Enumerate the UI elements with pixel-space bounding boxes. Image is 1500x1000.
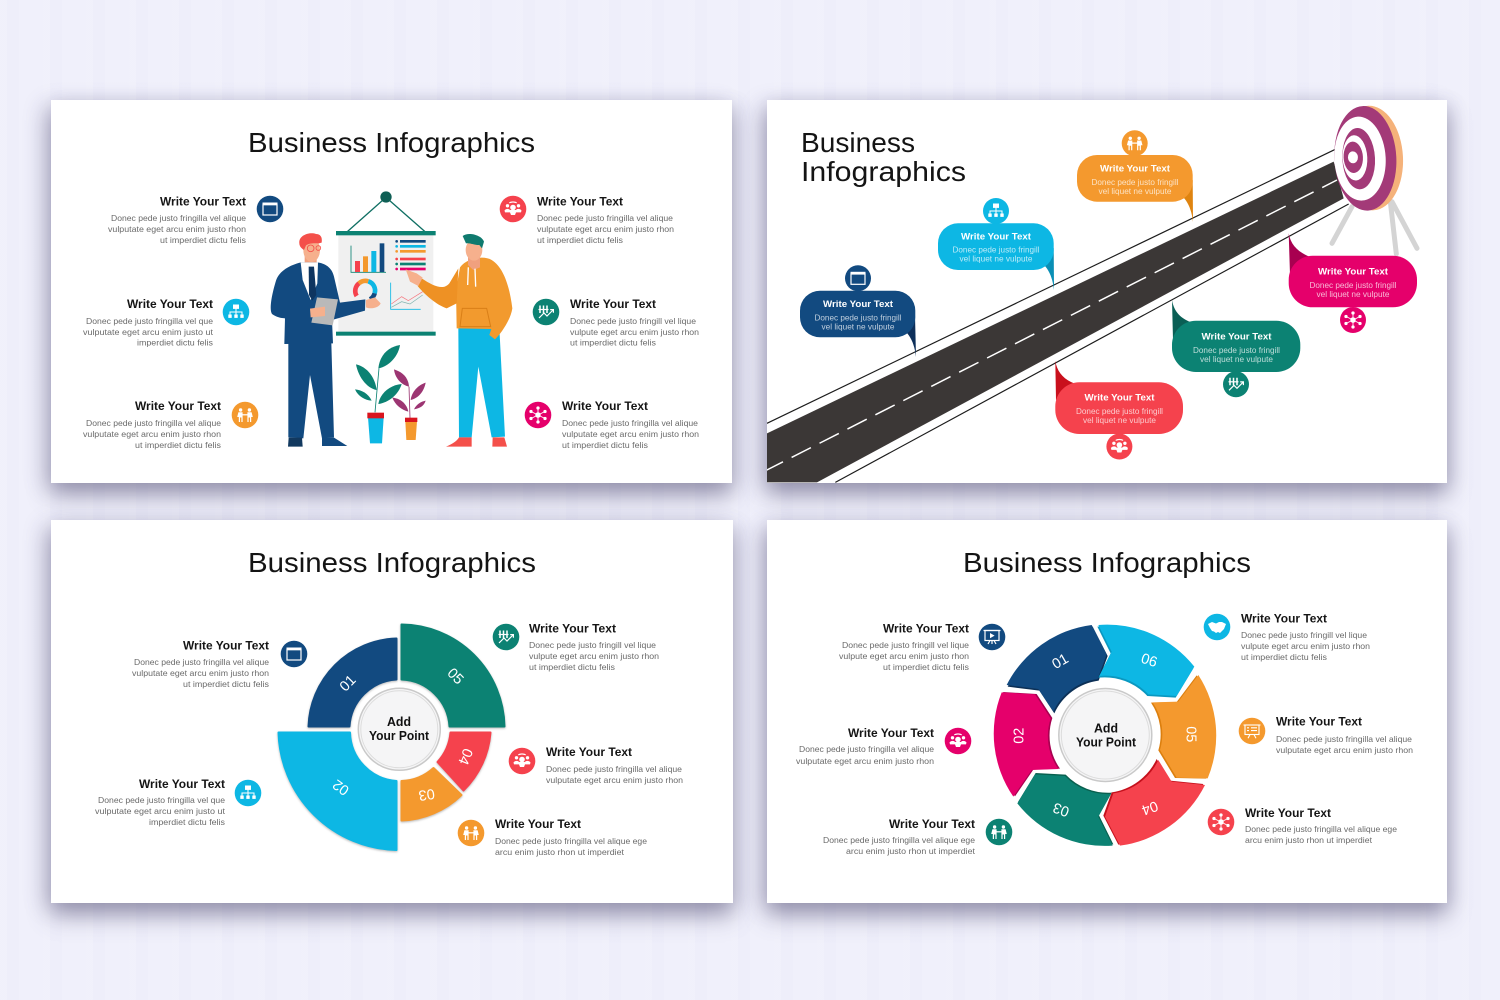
body text: ut imperdiet dictu felis bbox=[562, 440, 648, 450]
body text bbox=[546, 764, 683, 785]
callout: red bbox=[1055, 361, 1183, 460]
body text bbox=[796, 744, 934, 766]
body text: ut imperdiet dictu felis bbox=[529, 662, 615, 672]
body text: ut imperdiet dictu felis bbox=[537, 235, 623, 245]
callout text: Write Your Text bbox=[1100, 164, 1171, 174]
body text: vulputate eget arcu enim justo rhon bbox=[132, 668, 269, 678]
icon: network bbox=[525, 402, 551, 428]
heading: Write Your Text bbox=[570, 299, 656, 311]
arrow ring bbox=[994, 625, 1216, 846]
item: top left text bbox=[108, 196, 283, 245]
body text: ut imperdiet dictu felis bbox=[135, 440, 221, 450]
body text: vulpute eget arcu enim justo rhon bbox=[1241, 641, 1370, 651]
icon: handshake bbox=[1204, 614, 1230, 640]
body text: Donec pede justo fringill vel lique bbox=[1241, 630, 1367, 640]
body text: arcu enim justo rhon ut imperdiet bbox=[495, 847, 625, 857]
center circle: Your Point bbox=[1076, 736, 1137, 750]
segment 02 bbox=[278, 732, 396, 850]
body text: Donec pede justo fringill vel lique bbox=[570, 316, 696, 326]
callout: magenta bbox=[1289, 233, 1417, 333]
heading: Write Your Text bbox=[139, 779, 225, 791]
body text: Donec pede justo fringilla vel alique bbox=[134, 657, 269, 667]
body text bbox=[1276, 734, 1413, 755]
body text: Donec pede justo fringilla vel alique bbox=[546, 764, 682, 774]
body text: Donec pede justo fringilla vel alique bbox=[799, 744, 934, 754]
body text: vulpute eget arcu enim justo rhon bbox=[570, 327, 699, 337]
center circle: Add bbox=[1094, 722, 1118, 736]
body text: Donec pede justo fringilla vel alique bbox=[562, 418, 698, 428]
icon: org chart bbox=[235, 780, 261, 806]
callout text bbox=[1310, 266, 1397, 299]
heading: Write Your Text bbox=[135, 401, 221, 413]
segment 04 bbox=[438, 732, 490, 790]
center circle: Add bbox=[387, 715, 411, 729]
body text: Donec pede justo fringill vel lique bbox=[529, 640, 656, 650]
body text: vulputate eget arcu enim justo rhon bbox=[796, 756, 934, 766]
item 02 text bbox=[796, 728, 971, 766]
item 01 text bbox=[839, 624, 1005, 672]
body text: Donec pede justo fringilla vel que bbox=[98, 795, 225, 805]
callout text: vel liquet ne vulpute bbox=[1316, 290, 1390, 299]
callout text: vel liquet ne vulpute bbox=[822, 322, 895, 332]
callout text: vel liquet ne vulpute bbox=[1098, 187, 1172, 196]
body text bbox=[83, 316, 214, 348]
segment numbers: 06 bbox=[1139, 651, 1159, 671]
body text: ut imperdiet dictu felis bbox=[160, 235, 246, 245]
callout text bbox=[952, 232, 1040, 264]
icon: growth chart bbox=[1223, 371, 1249, 397]
figure: man in orange hoodie bbox=[406, 234, 512, 447]
icon: pair of people bbox=[986, 819, 1012, 845]
segment 04: 04 bbox=[454, 746, 475, 767]
callout text bbox=[1092, 164, 1179, 196]
title: Business Infographics bbox=[248, 127, 535, 158]
segment 06 bbox=[1097, 625, 1194, 698]
icon: pair of people bbox=[458, 820, 484, 846]
body text: Donec pede justo fringilla vel alique ege bbox=[495, 836, 647, 846]
plant: green leaves in blue pot bbox=[355, 345, 402, 443]
heading: Write Your Text bbox=[1241, 614, 1327, 626]
segment 01 bbox=[1007, 625, 1108, 713]
body text: ut imperdiet dictu felis bbox=[883, 662, 969, 672]
callout text: Write Your Text bbox=[1084, 392, 1155, 404]
icon: pair of people bbox=[1122, 130, 1148, 156]
icon: org chart bbox=[223, 299, 249, 325]
icon: team bbox=[500, 196, 526, 222]
body text: Donec pede justo fringilla vel alique bbox=[1276, 734, 1412, 744]
callout text bbox=[1193, 332, 1280, 364]
title: Business bbox=[801, 127, 915, 158]
body text: Donec pede justo fringilla vel alique bbox=[111, 213, 246, 223]
illustration: two businessmen at a presentation board bbox=[271, 191, 512, 447]
panel: road to target infographic bbox=[767, 100, 1447, 483]
callout text bbox=[1076, 392, 1163, 425]
callout text: Donec pede justo fringill bbox=[814, 314, 902, 322]
callout text: vel liquet ne vulpute bbox=[960, 254, 1033, 264]
callout text: Donec pede justo fringill bbox=[1310, 281, 1397, 290]
body text bbox=[495, 836, 647, 857]
center circle bbox=[1059, 688, 1152, 782]
body text: ut imperdiet dictu felis bbox=[183, 679, 269, 689]
road bbox=[764, 149, 1349, 482]
item 01 text bbox=[132, 640, 307, 689]
heading: Write Your Text bbox=[1245, 808, 1331, 820]
segment 05 bbox=[402, 624, 504, 726]
icon: training board bbox=[1239, 718, 1265, 744]
heading: Write Your Text bbox=[529, 624, 616, 636]
panel: five-part quadrant donut infographic bbox=[51, 520, 733, 903]
icon: calendar bbox=[281, 641, 307, 667]
body text bbox=[839, 640, 969, 672]
body text bbox=[562, 418, 699, 450]
center circle bbox=[358, 688, 440, 770]
icon: network bbox=[1208, 809, 1234, 835]
title: Business Infographics bbox=[963, 547, 1251, 578]
item: bottom right text bbox=[525, 401, 699, 450]
body text: Donec pede justo fringilla vel alique bbox=[86, 418, 221, 428]
callout: cyan bbox=[938, 198, 1054, 290]
callout text: Write Your Text bbox=[1318, 266, 1389, 278]
heading: Write Your Text bbox=[546, 747, 632, 759]
item 05 text bbox=[493, 624, 659, 672]
heading: Write Your Text bbox=[537, 196, 623, 208]
segment 05: 05 bbox=[444, 665, 466, 688]
icon: presentation screen bbox=[979, 624, 1005, 650]
item: top right text bbox=[500, 196, 674, 245]
body text: Donec pede justo fringilla vel alique ege bbox=[823, 835, 975, 845]
center circle: Your Point bbox=[369, 729, 430, 743]
title: Infographics bbox=[801, 156, 966, 187]
title: Business Infographics bbox=[248, 547, 536, 578]
callout text: Write Your Text bbox=[823, 299, 894, 310]
heading: Write Your Text bbox=[127, 299, 213, 311]
presentation board bbox=[336, 191, 436, 336]
icon: team bbox=[509, 748, 535, 774]
icon: calendar bbox=[257, 196, 283, 222]
body text: ut imperdiet dictu felis bbox=[570, 338, 656, 348]
body text: vulputate eget arcu enim justo rhon bbox=[108, 224, 246, 234]
body text: imperdiet dictu felis bbox=[149, 817, 225, 827]
callout: navy bbox=[800, 265, 916, 357]
body text bbox=[1241, 630, 1370, 662]
segment numbers: 03 bbox=[1051, 799, 1072, 819]
body text: arcu enim justo rhon ut imperdiet bbox=[846, 846, 976, 856]
item: middle left text bbox=[83, 299, 249, 348]
item 06 text bbox=[1204, 614, 1370, 662]
item 03 text bbox=[823, 819, 1012, 856]
body text bbox=[529, 640, 659, 672]
body text: vulputate eget arcu enim justo ut bbox=[95, 806, 226, 816]
body text: ut imperdiet dictu felis bbox=[1241, 652, 1327, 662]
segment 03 bbox=[1017, 773, 1113, 846]
heading: Write Your Text bbox=[495, 819, 581, 831]
callout text: Write Your Text bbox=[1202, 332, 1272, 342]
panel: presentation infographic bbox=[51, 100, 732, 483]
body text: Donec pede justo fringilla vel alique ege bbox=[1245, 824, 1397, 834]
body text: Donec pede justo fringilla vel alique bbox=[537, 213, 673, 223]
item 04 text bbox=[1208, 808, 1397, 845]
item 02 text bbox=[95, 779, 261, 827]
segment 01 bbox=[308, 638, 396, 726]
segment 05 bbox=[1151, 675, 1216, 779]
callout: green bbox=[1172, 300, 1300, 397]
icon: team bbox=[945, 728, 971, 754]
callout text: vel liquet ne vulpute bbox=[1083, 416, 1157, 425]
callout text: Donec pede justo fringill bbox=[1076, 407, 1163, 416]
body text bbox=[823, 835, 976, 856]
body text bbox=[95, 795, 226, 827]
body text: vulputate eget arcu enim justo rhon bbox=[1276, 745, 1413, 755]
callout text: Donec pede justo fringill bbox=[1092, 178, 1179, 187]
segment numbers: 01 bbox=[1050, 651, 1071, 673]
body text: vulputate eget arcu enim justo rhon bbox=[546, 775, 683, 785]
segment 01: 01 bbox=[337, 672, 360, 695]
segment numbers bbox=[1011, 651, 1199, 819]
body text: Donec pede justo fringill vel lique bbox=[842, 640, 969, 650]
item 04 text bbox=[509, 747, 683, 785]
segment numbers: 02 bbox=[1011, 728, 1027, 744]
donut chart bbox=[278, 624, 504, 850]
icon: org chart bbox=[983, 198, 1009, 224]
body text: vulputate eget arcu enim justo rhon bbox=[562, 429, 699, 439]
segment 03 bbox=[402, 768, 462, 820]
callout text bbox=[814, 299, 902, 332]
segment 02 bbox=[994, 692, 1060, 797]
icon: growth chart bbox=[533, 299, 559, 325]
callout text: Write Your Text bbox=[961, 232, 1032, 242]
item: middle right text bbox=[533, 299, 699, 348]
segment numbers: 04 bbox=[1139, 797, 1160, 818]
icon: calendar bbox=[845, 265, 871, 291]
body text bbox=[570, 316, 699, 348]
segment 02: 02 bbox=[330, 776, 352, 798]
callout text: Donec pede justo fringill bbox=[952, 246, 1040, 254]
body text: vulpute eget arcu enim justo rhon bbox=[529, 651, 659, 661]
body text bbox=[537, 213, 674, 245]
body text: vulputate eget arcu enim justo rhon bbox=[537, 224, 674, 234]
segment 04 bbox=[1103, 759, 1205, 846]
body text bbox=[1245, 824, 1397, 845]
body text: Donec pede justo fringilla vel que bbox=[86, 316, 213, 326]
heading: Write Your Text bbox=[883, 624, 969, 636]
icon: growth chart bbox=[493, 624, 519, 650]
heading: Write Your Text bbox=[562, 401, 648, 413]
figure: man in blue suit bbox=[271, 233, 381, 447]
body text: vulputate eget arcu enim justo rhon bbox=[83, 429, 221, 439]
callout: orange bbox=[1077, 130, 1193, 222]
segment numbers: 05 bbox=[1183, 726, 1199, 742]
callout text: Donec pede justo fringill bbox=[1193, 346, 1280, 355]
body text: arcu enim justo rhon ut imperdiet bbox=[1245, 835, 1373, 845]
heading: Write Your Text bbox=[183, 640, 269, 652]
heading: Write Your Text bbox=[160, 196, 246, 208]
body text: imperdiet dictu felis bbox=[137, 338, 213, 348]
plant: purple leaves in orange pot bbox=[392, 369, 426, 440]
icon: pair of people bbox=[232, 402, 258, 428]
item: bottom left text bbox=[83, 401, 258, 450]
heading: Write Your Text bbox=[848, 728, 934, 740]
body text bbox=[83, 418, 221, 450]
heading: Write Your Text bbox=[1276, 716, 1362, 728]
body text: vulputate eget arcu enim justo ut bbox=[83, 327, 214, 337]
item 03 text bbox=[458, 819, 647, 857]
panel: six-part arrow ring infographic bbox=[767, 520, 1447, 903]
heading: Write Your Text bbox=[889, 819, 975, 831]
body text bbox=[108, 213, 246, 245]
icon: network bbox=[1340, 307, 1366, 333]
body text: vulpute eget arcu enim justo rhon bbox=[839, 651, 969, 661]
segment 03: 03 bbox=[417, 785, 436, 803]
item 05 text bbox=[1239, 716, 1413, 755]
callout text: vel liquet ne vulpute bbox=[1200, 355, 1274, 364]
icon: team bbox=[1106, 434, 1132, 460]
title bbox=[801, 127, 966, 187]
target on stand bbox=[1332, 104, 1417, 254]
body text bbox=[132, 657, 269, 689]
